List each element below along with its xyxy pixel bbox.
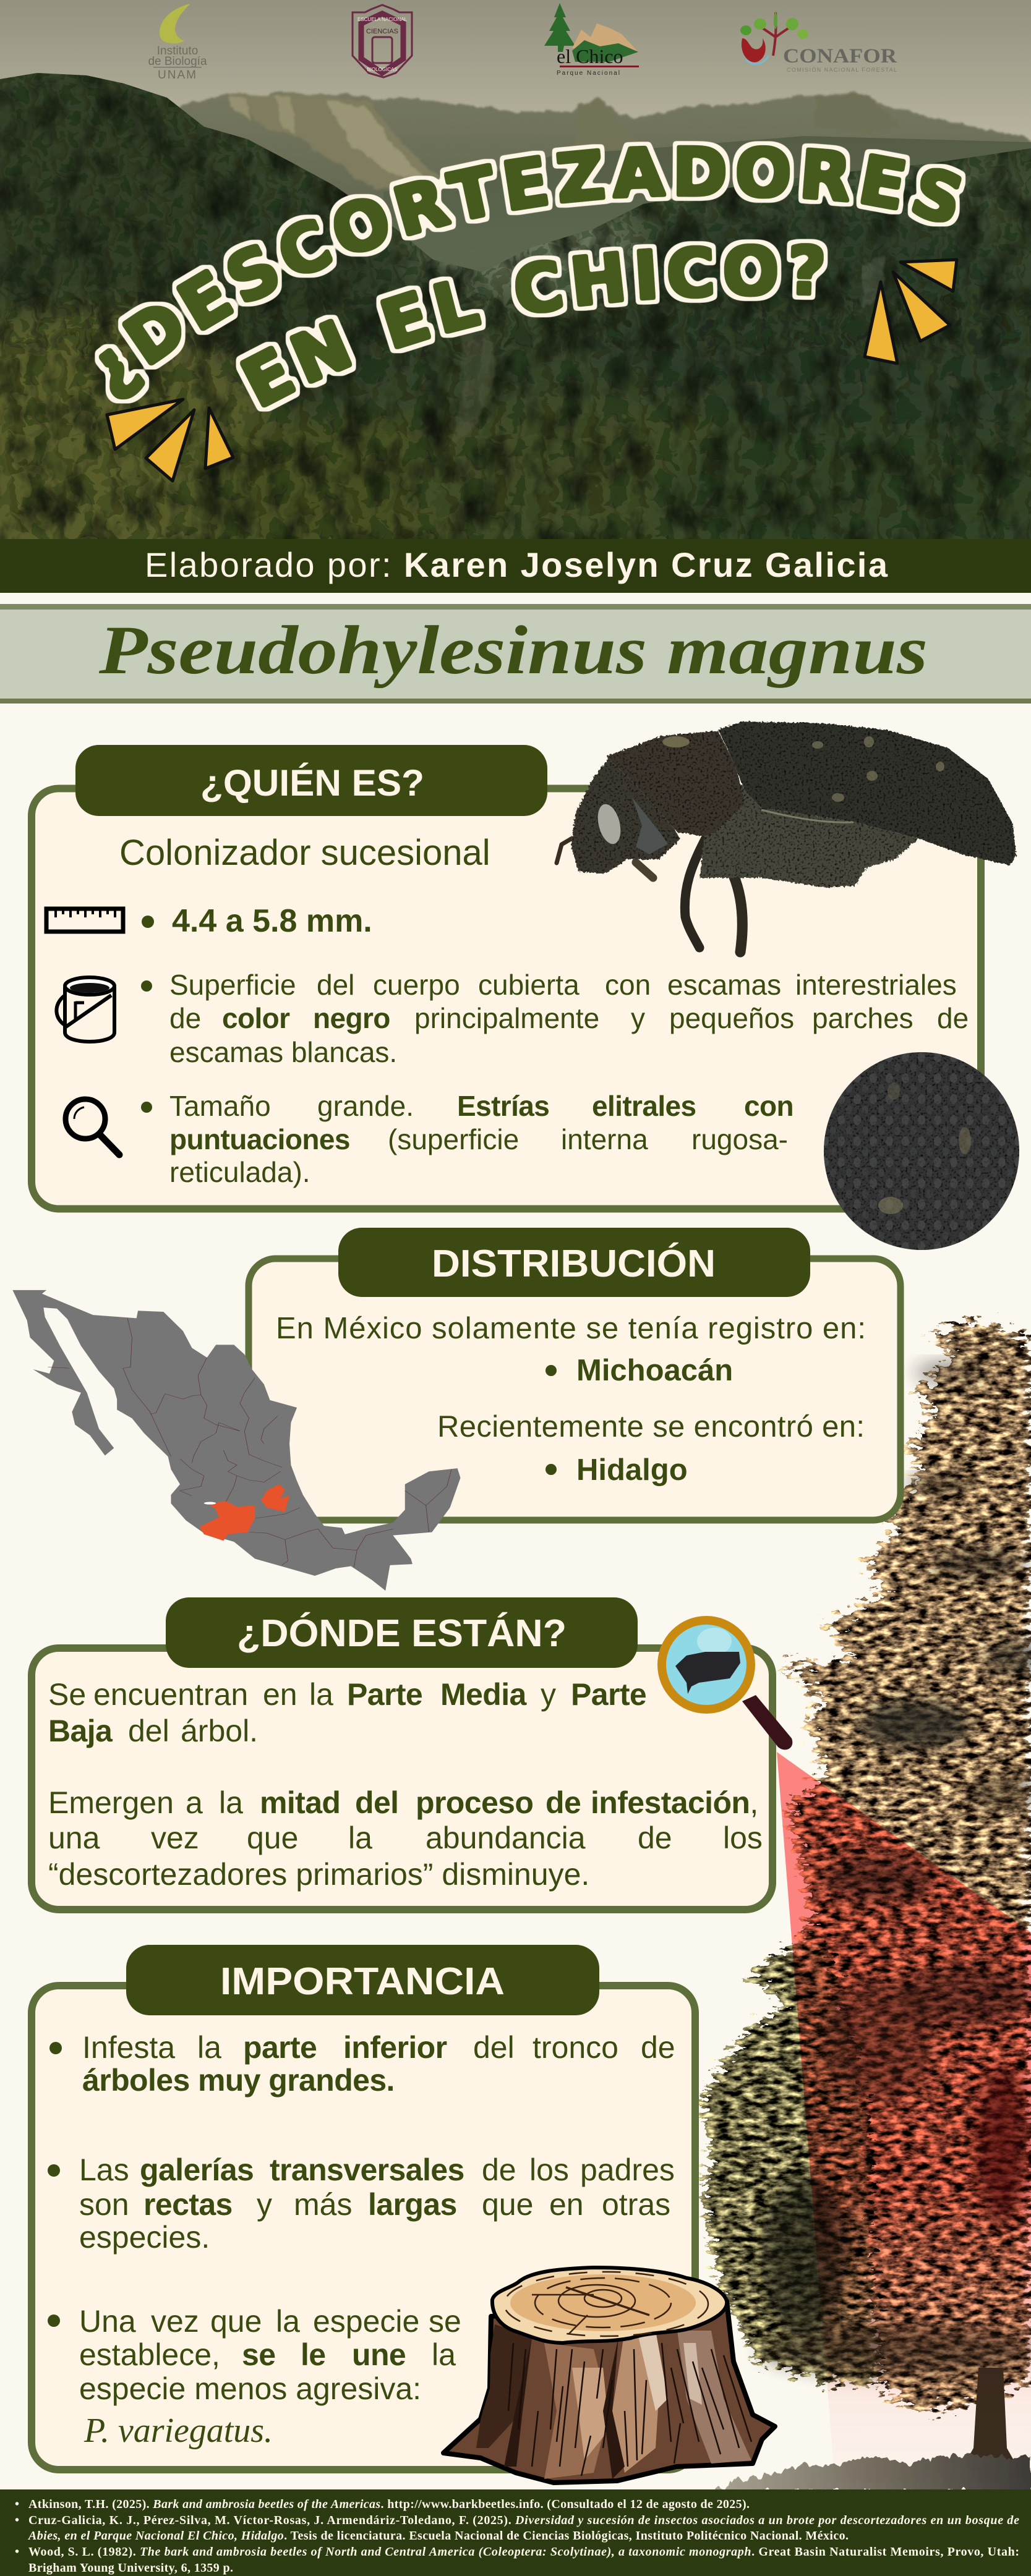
- bullet: lower trunk: de: [641, 2030, 675, 2065]
- bullet: joined species: la: [432, 2337, 456, 2372]
- emergence text: vez: [151, 1821, 199, 1855]
- bullet: lower trunk: la: [197, 2030, 221, 2065]
- bullet: galleries: son: [79, 2187, 129, 2222]
- author band: [0, 539, 1031, 593]
- bullet: lower trunk: [49, 2030, 675, 2098]
- bullet: galleries: Las: [79, 2153, 129, 2187]
- bullet: joined species: especie menos agresiva:: [79, 2371, 421, 2406]
- elytra text: Estrías: [457, 1090, 549, 1122]
- logo: CONAFOR: CONAFOR: [783, 45, 897, 67]
- references footer: Wood, S. L. (1982). The bark and ambrosia beetles of North and Central America (Coleoptera: Scolytinae), a taxonomic monograph. Great Basin Naturalist Memoirs, Provo, Utah:: [28, 2545, 1019, 2559]
- bullet: galleries: en: [549, 2187, 584, 2222]
- references footer: [0, 2489, 1031, 2576]
- bullet: joined species: le: [301, 2337, 325, 2372]
- icon: magnifier: [66, 1099, 119, 1155]
- references footer: Brigham Young University, 6, 1359 p.: [28, 2561, 233, 2575]
- body colour text: escamas: [667, 969, 781, 1001]
- icon: yellow rays left: [107, 399, 233, 481]
- pronotum: [606, 731, 745, 836]
- elytra text: [141, 1090, 794, 1188]
- location text: Parte: [347, 1677, 422, 1712]
- bullet: joined species: la: [276, 2304, 300, 2339]
- location text: la: [309, 1677, 333, 1712]
- species title banner: [0, 604, 1031, 704]
- red magnifier beam: [777, 1752, 1031, 2482]
- legs: [557, 838, 742, 952]
- bullet: galleries: que: [482, 2187, 533, 2222]
- icon: paint bucket: [56, 977, 114, 1042]
- highlighted state: Michoacán: [200, 1501, 255, 1541]
- bullet: galleries: de: [482, 2153, 516, 2187]
- location text: y: [541, 1677, 556, 1712]
- panel: distribución: [249, 1228, 901, 1520]
- bullet: lower trunk: árboles muy grandes.: [82, 2063, 395, 2098]
- elytra text: Tamaño: [169, 1090, 271, 1122]
- body colour text: cuerpo: [373, 969, 460, 1001]
- body colour text: [141, 969, 969, 1068]
- heading pill: [166, 1597, 638, 1668]
- size text: 4.4 a 5.8 mm.: [172, 903, 372, 939]
- body colour text: parches: [812, 1002, 913, 1034]
- bullet: galleries: galerías: [140, 2153, 254, 2187]
- bullet: lower trunk: inferior: [343, 2030, 447, 2065]
- location text: Baja: [48, 1714, 113, 1748]
- bullet: joined species: se: [429, 2304, 461, 2339]
- main title on arc: ¿DESCORTEZADORES: [95, 141, 966, 404]
- map of Mexico: [12, 1290, 460, 1591]
- tree trunk: [965, 2368, 1016, 2463]
- bullet: joined species: establece,: [79, 2337, 220, 2372]
- distant ridge with cliffs: [179, 90, 1031, 201]
- sky: [0, 0, 1031, 142]
- body colour text: Superficie: [169, 969, 296, 1001]
- emergence text: [48, 1785, 763, 1892]
- references footer: Atkinson, T.H. (2025). Bark and ambrosia beetles of the Americas. http://www.barkbeetles.info. (Consultado el 12 de agosto de 2025).: [28, 2497, 750, 2511]
- main title on arc: EN EL CHICO?: [236, 239, 828, 412]
- references footer: Cruz-Galicia, K. J., Pérez-Silva, M. Víctor-Rosas, J. Armendáriz-Toledano, F. (2025). Diversidad y sucesión de insectos asociados a un brote por descortezadores en un bosque de: [28, 2514, 1019, 2527]
- elytra text: reticulada).: [169, 1156, 310, 1188]
- location text: árbol.: [181, 1714, 258, 1748]
- logo: Instituto de Biología UNAM: Instituto: [157, 45, 198, 57]
- panel: importancia: [32, 1945, 695, 2470]
- elytra text: con: [744, 1090, 794, 1122]
- ground strip: [714, 2454, 1031, 2491]
- bullet: Hidalgo: Hidalgo: [576, 1453, 688, 1487]
- location text: en: [263, 1677, 297, 1712]
- emergence text: que: [247, 1821, 298, 1855]
- body colour text: de: [169, 1002, 201, 1034]
- highlighted state: Hidalgo: [261, 1484, 289, 1512]
- icon: yellow rays right: [865, 260, 957, 363]
- heading pill: IMPORTANCIA: [220, 1960, 505, 2003]
- decorative tree (infested conifer): [700, 1321, 1031, 2463]
- bullet: joined species: Una: [79, 2304, 136, 2339]
- bullet: galleries: especies.: [79, 2220, 210, 2255]
- body colour text: y: [631, 1002, 645, 1034]
- body colour text: cubierta: [478, 969, 580, 1001]
- emergence text: abundancia: [426, 1821, 586, 1855]
- emergence text: de: [638, 1821, 672, 1855]
- emergence text: la: [219, 1785, 243, 1820]
- eye: [594, 802, 624, 846]
- elytra text: rugosa-: [691, 1123, 788, 1155]
- body colour text: principalmente: [414, 1002, 599, 1034]
- references footer: Abies, en el Parque Nacional El Chico, Hidalgo. Tesis de licenciatura. Escuela Nacional de Ciencias Biológicas, Instituto Politécnico Nacional. México.: [27, 2529, 849, 2543]
- elytra: [718, 721, 1016, 865]
- references footer: •: [15, 2545, 19, 2559]
- location text: Parte: [571, 1677, 646, 1712]
- forest colour masses: [0, 73, 1031, 539]
- body colour text: pequeños: [669, 1002, 794, 1034]
- mid slope haze: [383, 136, 1031, 215]
- panel: dónde están: [32, 1597, 772, 1910]
- logo: Escuela Nacional de Ciencias Biológicas: CIENCIAS: [366, 28, 398, 35]
- elytra text: grande.: [317, 1090, 414, 1122]
- emergence text: “descortezadores primarios” disminuye.: [48, 1857, 589, 1892]
- heading pill: DISTRIBUCIÓN: [432, 1243, 716, 1285]
- location text: [48, 1677, 646, 1748]
- bullet: galleries: otras: [602, 2187, 670, 2222]
- heading pill: [126, 1945, 599, 2015]
- logo: Instituto de Biología UNAM: UNAM: [158, 69, 197, 82]
- text: previous record: En México solamente se tenía registro en:: [276, 1312, 866, 1345]
- bullet: joined species: [48, 2304, 461, 2450]
- elytra text: interna: [561, 1123, 648, 1155]
- logo: CONAFOR: COMISIÓN NACIONAL FORESTAL: [787, 67, 897, 73]
- beetle photo: [557, 721, 1016, 952]
- elytra text: (superficie: [388, 1123, 519, 1155]
- logo: Parque Nacional El Chico: el Chico: [557, 45, 623, 67]
- logo: Escuela Nacional de Ciencias Biológicas: BIOLÓGICAS: [367, 67, 398, 72]
- bullet: lower trunk: Infesta: [82, 2030, 175, 2065]
- emergence text: ,: [750, 1785, 758, 1820]
- elytra detail circle: [823, 1051, 1020, 1252]
- body colour text: del: [317, 969, 354, 1001]
- location text: Media: [440, 1677, 527, 1712]
- bullet: galleries: y: [257, 2187, 272, 2222]
- body colour text: interestriales: [795, 969, 957, 1001]
- bullet: galleries: transversales: [270, 2153, 464, 2187]
- elytra text: puntuaciones: [169, 1123, 350, 1155]
- text: recent record: Recientemente se encontró en:: [437, 1410, 865, 1443]
- bullet: galleries: rectas: [143, 2187, 233, 2222]
- hero photo: forest and mountains: [0, 0, 1031, 581]
- elytra text: elitrales: [592, 1090, 696, 1122]
- species title banner: Pseudohylesinus magnus: [98, 612, 928, 689]
- location text: del: [128, 1714, 169, 1748]
- heading pill: [338, 1228, 810, 1297]
- heading pill: ¿DÓNDE ESTÁN?: [237, 1612, 567, 1655]
- body colour text: con: [605, 969, 651, 1001]
- icon: magnifying glass with beetle: [657, 1616, 792, 1749]
- body colour text: de: [937, 1002, 969, 1034]
- references footer: •: [15, 2514, 19, 2527]
- bullet: galleries: padres: [580, 2153, 675, 2187]
- references footer: •: [15, 2497, 19, 2511]
- emergence text: infestación: [591, 1785, 750, 1820]
- body colour text: escamas blancas.: [169, 1036, 397, 1068]
- bullet: Michoacán: Michoacán: [576, 1354, 733, 1387]
- logo: Parque Nacional El Chico: Parque Nacional: [557, 70, 621, 77]
- bullet: lower trunk: tronco: [533, 2030, 618, 2065]
- bullet: joined species: une: [352, 2337, 406, 2372]
- logo: Escuela Nacional de Ciencias Biológicas: ESCUELA NACIONAL: [357, 17, 408, 22]
- bullet: galleries: los: [529, 2153, 569, 2187]
- bullet: joined species: se: [242, 2337, 275, 2372]
- bullet: joined species: P. variegatus.: [83, 2412, 273, 2450]
- emergence text: proceso: [416, 1785, 533, 1820]
- location text: Se: [48, 1677, 86, 1712]
- emergence text: mitad: [260, 1785, 340, 1820]
- emergence text: la: [348, 1821, 372, 1855]
- location text: encuentran: [93, 1677, 248, 1712]
- abdomen: [693, 785, 920, 888]
- emergence text: de: [545, 1785, 581, 1820]
- illustration: tree stump: [443, 2268, 775, 2483]
- emergence text: los: [723, 1821, 763, 1855]
- emergence text: una: [48, 1821, 100, 1855]
- bullet: galleries: más: [294, 2187, 352, 2222]
- emergence text: del: [355, 1785, 398, 1820]
- bullet: joined species: que: [210, 2304, 262, 2339]
- bullet: galleries: largas: [368, 2187, 457, 2222]
- logo: Escuela Nacional de Ciencias Biológicas: [353, 5, 412, 77]
- bullet: galleries: [48, 2153, 675, 2255]
- icon: ruler: [46, 909, 123, 932]
- bullet: lower trunk: del: [473, 2030, 515, 2065]
- emergence text: Emergen: [48, 1785, 174, 1820]
- bullet: joined species: especie: [313, 2304, 419, 2339]
- head: [571, 757, 680, 874]
- subtitle: Colonizador sucesional: [119, 833, 490, 873]
- bullet: lower trunk: parte: [243, 2030, 317, 2065]
- bullet: joined species: vez: [151, 2304, 199, 2339]
- logo: Instituto de Biología UNAM: [148, 4, 207, 82]
- emergence text: a: [186, 1785, 203, 1820]
- heading pill: ¿QUIÉN ES?: [200, 762, 424, 804]
- logo: Instituto de Biología UNAM: de Biología: [148, 55, 207, 68]
- author band: Elaborado por: Karen Joselyn Cruz Galicia: [145, 545, 888, 584]
- body colour text: color: [222, 1002, 290, 1034]
- logo: CONAFOR: [740, 11, 897, 73]
- body colour text: negro: [313, 1002, 390, 1034]
- panel: quién es: [32, 745, 981, 1209]
- logo: Parque Nacional El Chico: [544, 3, 639, 77]
- heading pill: [75, 745, 547, 816]
